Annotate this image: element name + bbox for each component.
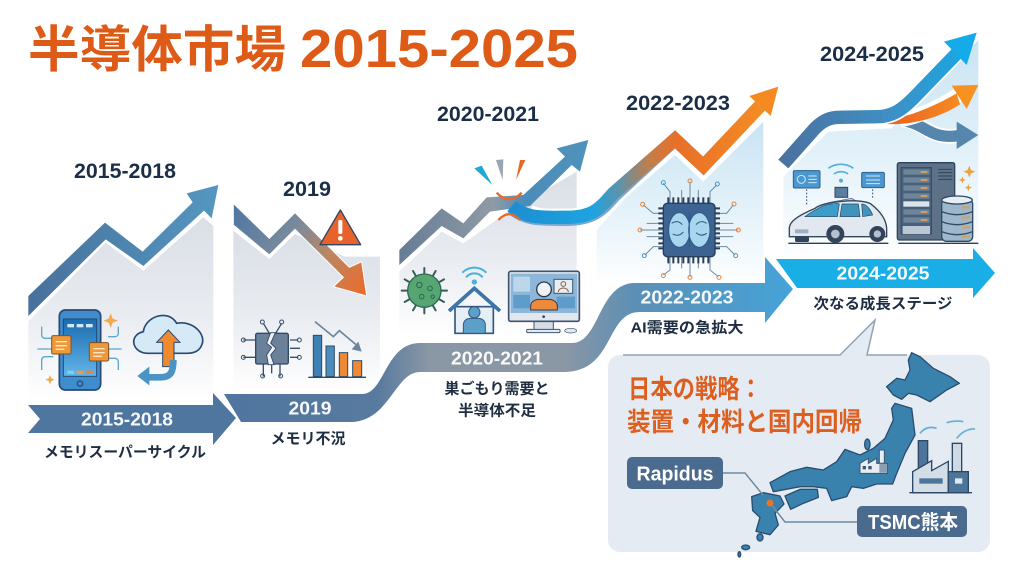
icon: smartphone	[37, 310, 122, 390]
icon: server rack and database	[897, 163, 978, 243]
label line 2: 半導体不足	[458, 402, 536, 420]
ribbon year: 2020-2021: 2020-2021	[451, 348, 543, 368]
icon: video call monitor	[509, 271, 579, 333]
tag: TSMC熊本: TSMC熊本	[868, 511, 958, 534]
panel: 2019	[233, 178, 380, 388]
heading: 2019: 2019	[283, 178, 331, 201]
icon: autonomous car	[788, 164, 888, 243]
icon: small factory	[860, 450, 887, 473]
recovery arrow	[399, 140, 588, 265]
callout border	[623, 320, 907, 355]
label: 2020-2021: 巣ごもり需要と	[444, 380, 550, 398]
burst marks	[474, 159, 525, 220]
tag: Rapidus: Rapidus	[636, 464, 714, 486]
heading: 2022-2023: 2022-2023	[626, 92, 730, 115]
ribbon year: 2015-2018	[81, 410, 173, 430]
heading: 2024-2025: 2024-2025	[820, 43, 924, 66]
branching arrow: grey-blue	[903, 120, 978, 149]
heading: 2020-2021: 2020-2021	[437, 103, 539, 126]
callout heading: 装置・材料と国内回帰	[627, 407, 862, 437]
icon: home with wifi	[449, 268, 500, 333]
area chart background	[597, 122, 763, 282]
label: 2019: メモリ不況	[270, 430, 346, 448]
ribbon: 2024-2025	[776, 248, 995, 298]
title: 2015-2025	[300, 19, 578, 79]
ribbon: timeline 2019 to 2023	[224, 257, 793, 422]
panel: 2024-2025	[776, 33, 995, 313]
icon: declining bar chart	[308, 322, 366, 377]
area chart background	[28, 217, 213, 397]
ribbon: 2015-2018	[28, 393, 236, 445]
title	[28, 19, 578, 79]
icon: cloud upload	[134, 315, 203, 385]
panel: 2022-2023	[597, 92, 763, 336]
callout heading: 日本の戦略：	[628, 374, 762, 404]
heading: 2015-2018: 2015-2018	[74, 160, 176, 183]
callout heading	[627, 374, 862, 437]
icon: virus	[402, 268, 447, 313]
surging arrow	[512, 87, 778, 219]
panel: 2020-2021	[399, 87, 778, 420]
ribbon year: 2019: 2019	[288, 398, 332, 418]
marker: Kumamoto	[766, 500, 774, 506]
white halo under surging arrow	[528, 106, 760, 217]
map: Japan	[738, 353, 959, 557]
label: 2022-2023: AI需要の急拡大	[630, 318, 744, 336]
icon: broken chip	[241, 320, 301, 378]
icon: AI brain chip	[638, 179, 740, 279]
icon: large factory	[909, 421, 975, 493]
tag: TSMC熊本	[857, 506, 967, 537]
area chart background	[783, 40, 978, 253]
area chart background	[233, 231, 380, 388]
panel: 2015-2018	[28, 160, 236, 461]
area chart background	[399, 172, 577, 333]
callout box	[608, 320, 990, 552]
title: 半導体市場	[28, 22, 286, 78]
ribbon year: 2024-2025: 2024-2025	[836, 264, 930, 284]
falling arrow	[233, 203, 367, 296]
connector: TSMC	[770, 503, 857, 522]
branching arrow: main blue	[783, 33, 977, 164]
icon: warning triangle	[320, 210, 361, 245]
ribbon year: 2022-2023: 2022-2023	[640, 288, 734, 308]
panel: Japan strategy callout	[608, 320, 990, 557]
branching arrow: orange	[887, 85, 978, 124]
label: 2024-2025: 次なる成長ステージ	[814, 294, 952, 312]
tag: Rapidus	[627, 457, 723, 489]
label: メモリスーパーサイクル	[44, 444, 206, 461]
connector: Rapidus	[723, 473, 763, 495]
growth arrow	[28, 185, 218, 316]
